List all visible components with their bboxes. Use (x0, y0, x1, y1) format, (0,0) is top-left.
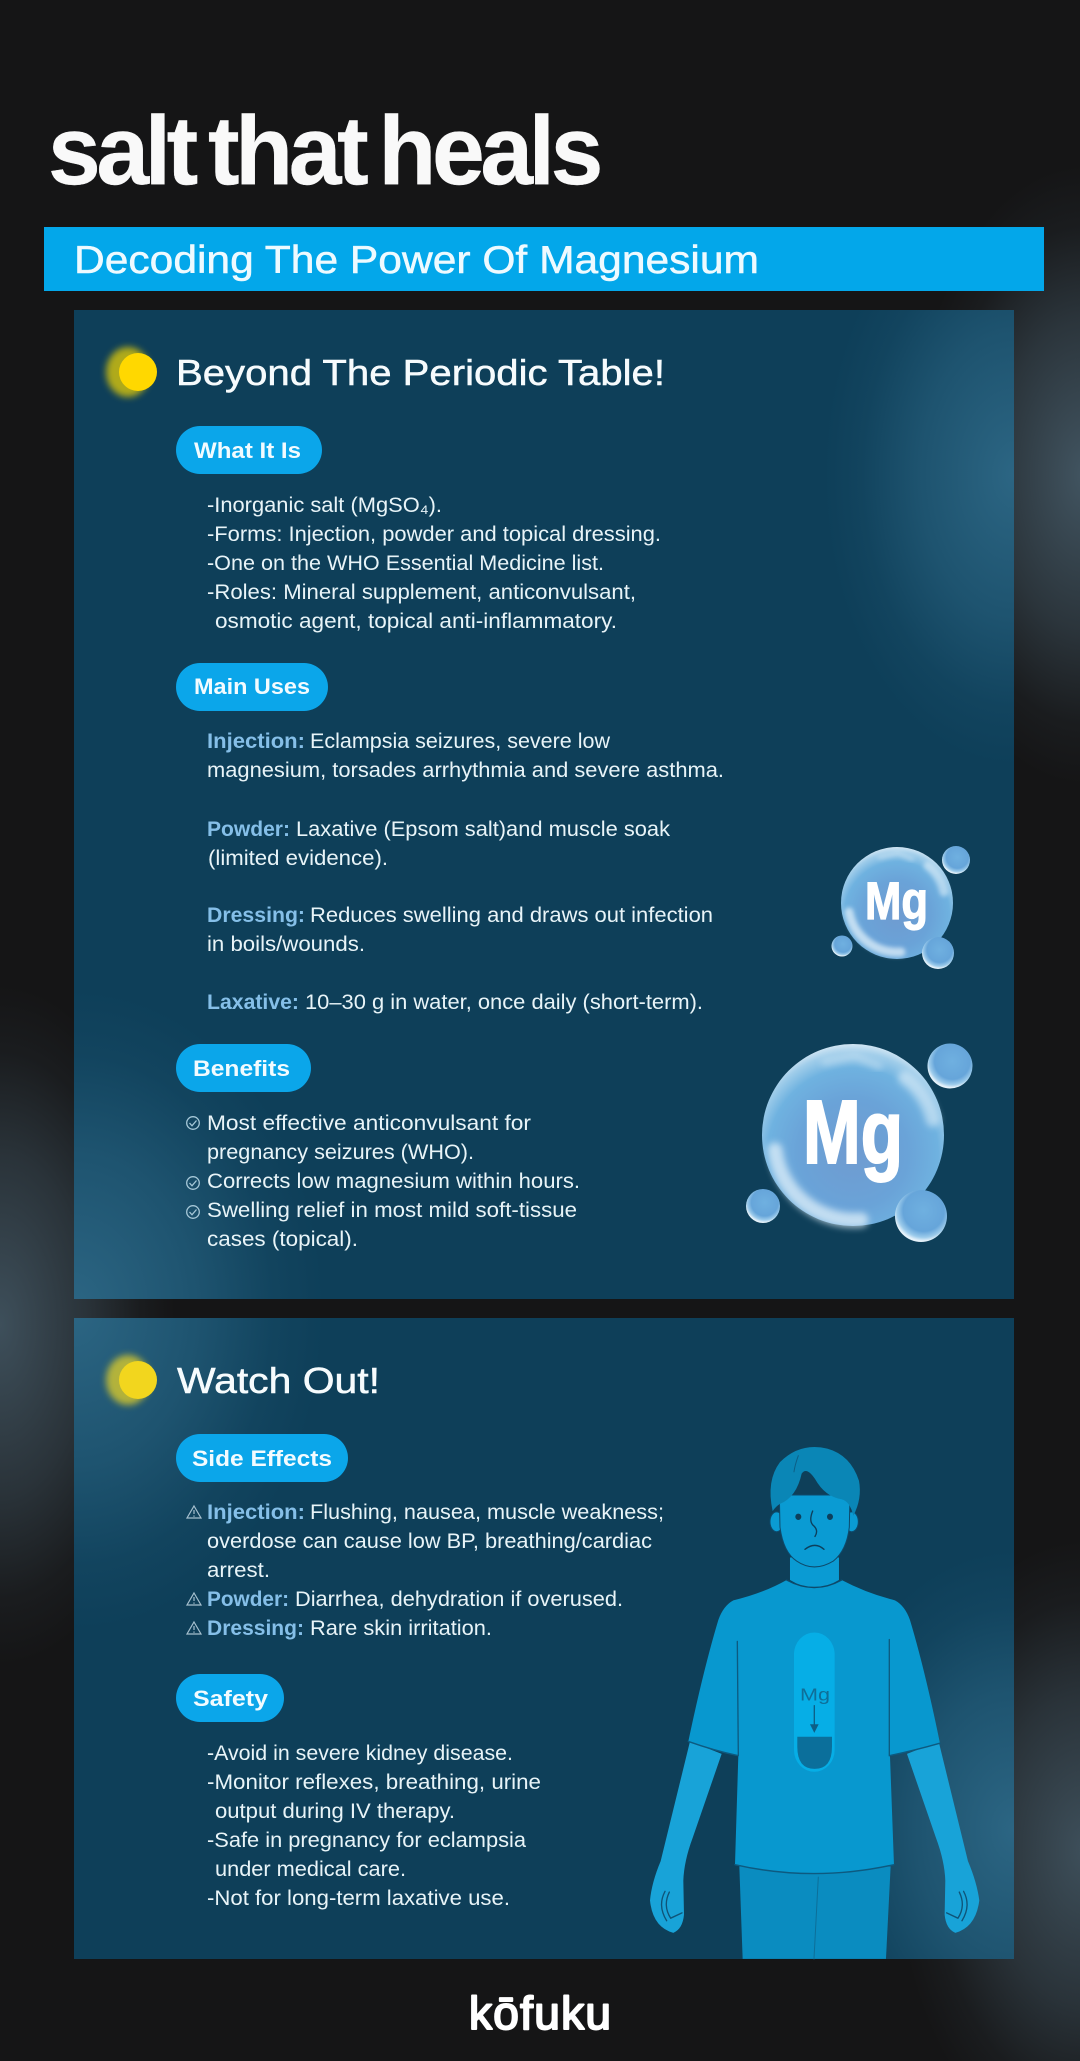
panel backgrounds with glows (74, 310, 1014, 1959)
pants (739, 1866, 891, 1959)
text: main uses: magnesium, torsades arrhythmia and severe asthma. (207, 759, 724, 782)
text: safety: output during IV therapy. (215, 1800, 455, 1823)
text: main uses: Laxative: (207, 991, 299, 1014)
text: benefits: cases (topical). (207, 1228, 358, 1251)
neck and head (770, 1447, 860, 1587)
text: safety (207, 1742, 541, 1910)
text: benefits: Corrects low magnesium within hours. (207, 1170, 580, 1193)
text: side effects (207, 1501, 664, 1640)
subtitle banner: Decoding The Power Of Magnesium (74, 239, 759, 282)
text: safety: -Avoid in severe kidney disease. (207, 1742, 513, 1765)
text: main uses (207, 730, 724, 1014)
text: side effects: overdose can cause low BP, breathing/cardiac (207, 1530, 652, 1553)
icon: small Mg bubble: Mg (865, 872, 928, 931)
icon: large Mg bubble: Mg (803, 1083, 903, 1183)
text: what it is: -Roles: Mineral supplement, anticonvulsant, (207, 581, 636, 604)
text: main uses: Injection: (207, 730, 305, 753)
pill: what it is (176, 426, 322, 474)
text: side effects: Rare skin irritation. (310, 1617, 492, 1640)
pill: benefits (176, 1044, 311, 1092)
text: side effects: Dressing: (207, 1617, 304, 1640)
pill: what it is: What It Is (194, 438, 301, 463)
text: side effects: Diarrhea, dehydration if overused. (295, 1588, 623, 1611)
text: side effects: Flushing, nausea, muscle weakness; (310, 1501, 664, 1524)
magnesium capsule gauge (794, 1632, 835, 1772)
pill: safety: Safety (193, 1686, 269, 1711)
logo: kofuku: kōfuku (469, 1987, 611, 2039)
title: salt that heals (48, 96, 600, 205)
icon: large Mg bubble (746, 1044, 972, 1242)
shirt (688, 1580, 940, 1874)
warning icons (187, 1506, 201, 1634)
text: what it is: -Inorganic salt (MgSO₄). (207, 494, 442, 517)
text: what it is: -Forms: Injection, powder and topical dressing. (207, 523, 661, 546)
pill: side effects (176, 1434, 348, 1482)
text: what it is: osmotic agent, topical anti-inflammatory. (215, 610, 617, 633)
text: side effects: Injection: (207, 1501, 305, 1524)
text: main uses: Eclampsia seizures, severe low (310, 730, 611, 753)
pill: main uses: Main Uses (194, 674, 310, 699)
icon: person with low magnesium gauge (650, 1447, 979, 1959)
text: benefits: Most effective anticonvulsant for (207, 1112, 531, 1135)
text: what it is: -One on the WHO Essential Medicine list. (207, 552, 604, 575)
text: side effects: Powder: (207, 1588, 289, 1611)
text: what it is (207, 494, 661, 633)
pill: main uses (176, 663, 328, 711)
text: benefits: Swelling relief in most mild soft-tissue (207, 1199, 577, 1222)
text: main uses: (limited evidence). (208, 847, 388, 870)
magnesium capsule gauge: Mg (800, 1685, 830, 1704)
text: benefits (207, 1112, 580, 1251)
text: safety: -Safe in pregnancy for eclampsia (207, 1829, 526, 1852)
check icons (187, 1117, 199, 1218)
heading: Beyond The Periodic Table! (176, 352, 665, 393)
text: main uses: in boils/wounds. (207, 933, 365, 956)
pill: safety (176, 1674, 284, 1722)
heading dot icon (106, 347, 157, 397)
pill: side effects: Side Effects (192, 1446, 332, 1471)
text: main uses: Powder: (207, 818, 290, 841)
text: safety: under medical care. (215, 1858, 406, 1881)
text: main uses: Dressing: (207, 904, 305, 927)
heading: Watch Out! (177, 1360, 380, 1401)
text: main uses: 10–30 g in water, once daily (short-term). (305, 991, 703, 1014)
icon: small Mg bubble (832, 846, 970, 969)
subtitle banner (44, 227, 1044, 291)
text: main uses: Reduces swelling and draws out infection (310, 904, 713, 927)
panel: beyond the periodic table (106, 347, 972, 1251)
text: benefits: pregnancy seizures (WHO). (207, 1141, 474, 1164)
text: safety: -Monitor reflexes, breathing, urine (207, 1771, 541, 1794)
heading dot icon (106, 1355, 157, 1405)
arms (650, 1741, 979, 1933)
text: side effects: arrest. (207, 1559, 270, 1582)
text: main uses: Laxative (Epsom salt)and muscle soak (296, 818, 671, 841)
text: safety: -Not for long-term laxative use. (207, 1887, 510, 1910)
pill: benefits: Benefits (193, 1056, 290, 1081)
panel: watch out (106, 1355, 979, 1959)
